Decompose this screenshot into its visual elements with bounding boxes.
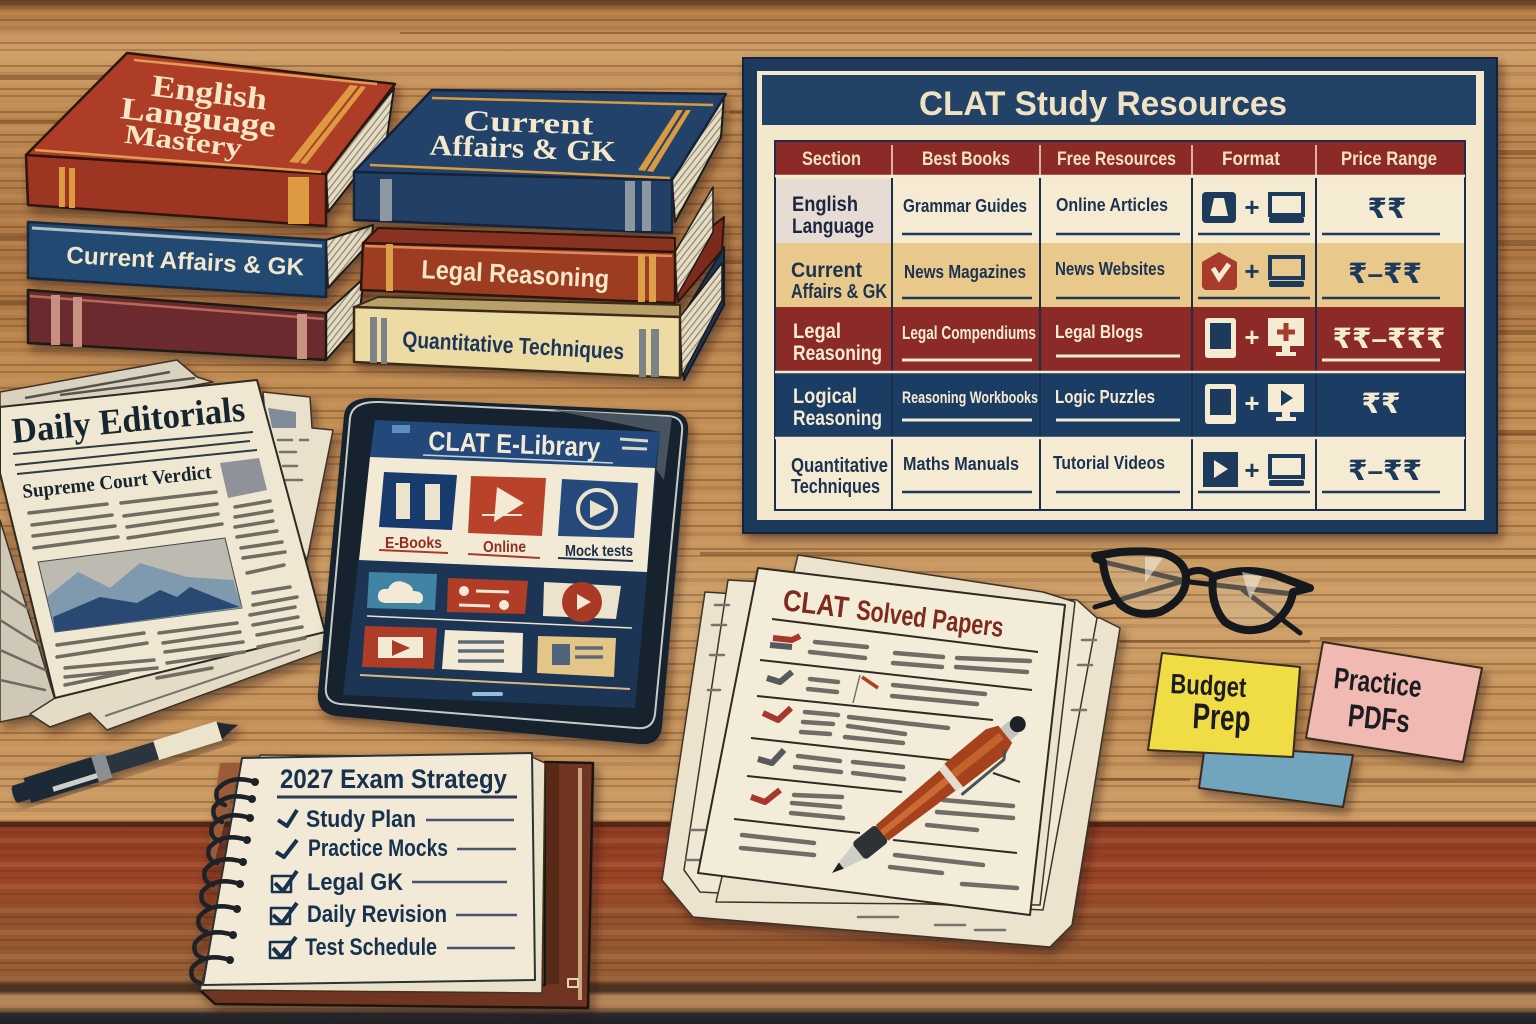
row: Legal Reasoning: ₹₹–₹₹₹ [1333, 323, 1445, 354]
checklist: Test Schedule [305, 934, 437, 961]
row: Legal Reasoning: Legal [793, 320, 841, 343]
subheading: Supreme Court Verdict [21, 461, 213, 503]
main answer sheet [698, 568, 1065, 915]
row: Legal Reasoning: Legal Blogs [1055, 322, 1143, 342]
poster title bar [762, 75, 1476, 125]
header row [775, 141, 1465, 175]
book: Quantitative Techniques: Quantitative Techniques [402, 326, 625, 364]
icon: e-books: E-Books [385, 535, 442, 552]
sheet title: Solved Papers [855, 594, 1005, 643]
row: Current Affairs & GK: + [1244, 256, 1260, 286]
row: Logical Reasoning: Logical [793, 385, 857, 408]
row: Legal Reasoning: + [1244, 322, 1260, 352]
icon: e-books [379, 472, 457, 553]
book: Current Affairs & GK spine: Current Affairs & GK [66, 242, 305, 281]
book: maroon, bottom [28, 278, 364, 360]
row: Logical Reasoning: Reasoning [793, 407, 882, 430]
notebook: 2027 Exam Strategy [191, 753, 593, 1008]
icon: online [468, 476, 546, 558]
book: Current Affairs & GK cover [354, 90, 726, 233]
row: English Language [775, 179, 1465, 243]
book title: English Language Mastery: English [150, 68, 269, 117]
row: Quantitative Techniques: ₹–₹₹ [1348, 455, 1422, 486]
poster title bar: CLAT Study Resources [919, 85, 1287, 123]
sticky: Practice PDFs: Practice [1332, 662, 1423, 704]
sticky: Practice PDFs: PDFs [1346, 697, 1412, 739]
row: Quantitative Techniques: + [1244, 455, 1260, 485]
row: English Language: Grammar Guides [903, 196, 1027, 216]
checklist: Daily Revision [307, 901, 447, 928]
book title: Current Affairs & GK: Current [463, 105, 594, 141]
row: Legal Reasoning: Reasoning [793, 342, 882, 365]
header row: Free Resources [1057, 149, 1176, 170]
row: English Language: + [1244, 192, 1260, 222]
book: English Language Mastery [26, 53, 395, 226]
book: Quantitative Techniques [354, 247, 724, 380]
icon: online: Online [483, 539, 526, 556]
row: Logical Reasoning: Reasoning Workbooks [902, 388, 1038, 407]
row: Current Affairs & GK: Current [791, 259, 862, 282]
row: Current Affairs & GK: News Magazines [904, 262, 1026, 282]
row: English Language: Online Articles [1056, 195, 1168, 215]
checklist: Legal GK [307, 869, 404, 896]
checklist: Practice Mocks [308, 835, 448, 862]
book: Legal Reasoning [361, 187, 724, 303]
row: Quantitative Techniques: Tutorial Videos [1053, 453, 1165, 473]
pen [822, 707, 1036, 889]
table [775, 141, 1465, 510]
row: English Language: ₹₹ [1368, 193, 1406, 224]
row: Logical Reasoning: Logic Puzzles [1055, 387, 1155, 407]
sticky notes [1148, 642, 1482, 807]
checklist: Study Plan [306, 806, 416, 833]
book title: English Language Mastery: Mastery [123, 119, 244, 163]
header row: Best Books [922, 149, 1010, 170]
marker pen [9, 712, 242, 807]
row: Current Affairs & GK: News Websites [1055, 259, 1165, 279]
glasses [1095, 551, 1310, 633]
row: Quantitative Techniques: Maths Manuals [903, 454, 1019, 474]
row: Quantitative Techniques: Techniques [791, 476, 880, 498]
row: Quantitative Techniques: Quantitative [791, 455, 888, 477]
row: Legal Reasoning: Legal Compendiums [902, 323, 1036, 343]
sticky: Budget Prep: Budget [1170, 668, 1247, 703]
newspaper: Daily Editorials [0, 360, 333, 730]
app tiles [360, 572, 632, 689]
sheet title [781, 584, 1006, 644]
book title: Current Affairs & GK [429, 104, 617, 168]
book: Current Affairs & GK spine [28, 222, 373, 297]
study resources table poster [743, 58, 1497, 533]
row: Current Affairs & GK [775, 243, 1465, 307]
book title: Current Affairs & GK: Affairs & GK [429, 130, 616, 168]
tablet: CLAT E-Library: CLAT E-Library [428, 426, 601, 463]
row: English Language: English [792, 193, 858, 216]
notebook heading: 2027 Exam Strategy [280, 764, 507, 794]
solved papers stack [662, 555, 1120, 947]
sticky: blue [1199, 745, 1353, 807]
header row: Section [802, 149, 861, 170]
row: Legal Reasoning [775, 307, 1465, 372]
book stack: right [354, 90, 726, 380]
newspaper photo [38, 538, 242, 632]
row: Current Affairs & GK: Affairs & GK [791, 281, 887, 303]
book stack: left [26, 53, 395, 360]
tablet: CLAT E-Library [318, 398, 688, 744]
book: Legal Reasoning: Legal Reasoning [421, 254, 610, 294]
sticky: Practice PDFs [1306, 642, 1482, 762]
row: Quantitative Techniques [775, 440, 1465, 510]
background sheets [0, 360, 333, 730]
sticky: Budget Prep [1148, 653, 1300, 757]
headline: Daily Editorials [10, 389, 247, 451]
row: Current Affairs & GK: ₹–₹₹ [1348, 258, 1422, 289]
book title: English Language Mastery: Language [119, 90, 278, 144]
row: Logical Reasoning: + [1244, 388, 1260, 418]
header row: Price Range [1341, 149, 1437, 170]
book title: English Language Mastery [116, 64, 281, 167]
row: Logical Reasoning [775, 372, 1465, 437]
row: English Language: Language [792, 215, 874, 238]
spiral binding [191, 778, 259, 983]
icon: mock tests: Mock tests [565, 543, 633, 560]
row: Logical Reasoning: ₹₹ [1362, 388, 1400, 419]
icon: mock tests [558, 479, 638, 561]
back sheets [662, 555, 1120, 947]
header row: Format [1222, 149, 1281, 170]
sticky: Budget Prep: Prep [1192, 695, 1252, 739]
sheet title: CLAT [781, 584, 851, 625]
checklist [270, 806, 517, 961]
